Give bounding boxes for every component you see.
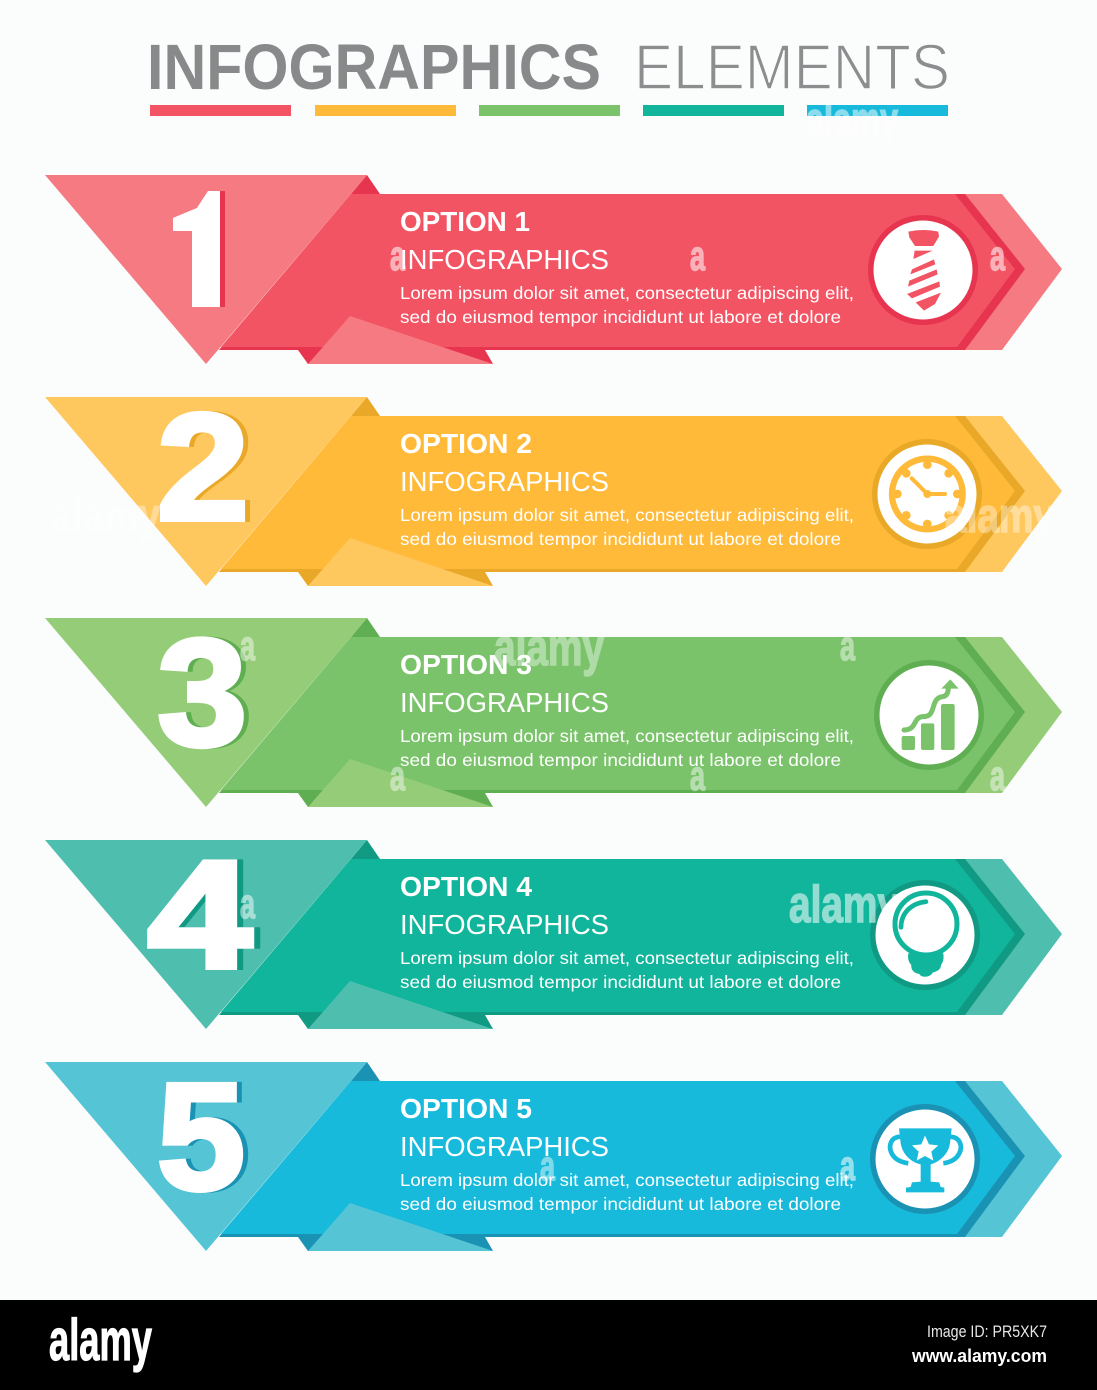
option 1 text: OPTION 1 <box>400 206 530 237</box>
option 4 text: OPTION 4 <box>400 871 532 902</box>
option 2 text: INFOGRAPHICS <box>400 466 609 497</box>
option 5 text <box>400 1093 854 1214</box>
watermarks: a <box>240 622 255 669</box>
option 5 text: sed do eiusmod tempor incididunt ut labore et dolore <box>400 1194 841 1214</box>
watermarks: a <box>690 232 705 279</box>
footer bar <box>0 1300 1097 1390</box>
option 3 text: OPTION 3 <box>400 649 532 680</box>
option 3 text: Lorem ipsum dolor sit amet, consectetur adipiscing elit, <box>400 726 854 746</box>
panel: option 5 <box>45 1052 1062 1251</box>
option 5 text: OPTION 5 <box>400 1093 532 1124</box>
watermarks <box>50 93 1055 1189</box>
option 4 text: sed do eiusmod tempor incididunt ut labore et dolore <box>400 972 841 992</box>
watermarks: alamy <box>494 619 604 677</box>
title <box>147 31 950 103</box>
panel: option 3 <box>45 608 1062 807</box>
number 3: 3 <box>162 608 252 778</box>
image id: Image ID: PR5XK7 <box>927 1322 1047 1341</box>
number 1 <box>173 191 225 307</box>
watermarks: a <box>390 232 405 279</box>
option 3 text: INFOGRAPHICS <box>400 687 609 718</box>
title: ELEMENTS <box>634 31 950 103</box>
option 4 text: INFOGRAPHICS <box>400 909 609 940</box>
option 1 text: sed do eiusmod tempor incididunt ut labore et dolore <box>400 307 841 327</box>
title: INFOGRAPHICS <box>147 31 601 103</box>
number 4: 4 <box>148 830 252 1000</box>
icon: trophy <box>870 1104 980 1214</box>
watermarks: a <box>690 752 705 799</box>
option 1 text: Lorem ipsum dolor sit amet, consectetur adipiscing elit, <box>400 283 854 303</box>
panel: option 4 <box>45 830 1062 1029</box>
watermarks: a <box>990 232 1005 279</box>
option 3 text: sed do eiusmod tempor incididunt ut labore et dolore <box>400 750 841 770</box>
option 2 text <box>400 428 854 549</box>
number 1: 1 <box>158 162 246 341</box>
option 5 text: Lorem ipsum dolor sit amet, consectetur adipiscing elit, <box>400 1170 854 1190</box>
watermarks: a <box>240 880 255 927</box>
icon: clock <box>872 439 982 549</box>
watermarks: a <box>990 752 1005 799</box>
option 4 text <box>400 871 854 992</box>
number 2: 2 <box>162 382 254 552</box>
number 4: 4 <box>154 830 258 1000</box>
website: www.alamy.com <box>911 1346 1047 1366</box>
watermarks: a <box>840 622 855 669</box>
number 5: 5 <box>157 1052 245 1222</box>
icon: light bulb <box>870 880 980 990</box>
option 1 text: INFOGRAPHICS <box>400 244 609 275</box>
icon: necktie <box>868 215 978 325</box>
watermarks: a <box>540 1142 555 1189</box>
colour legend bars <box>150 105 948 116</box>
number 3: 3 <box>158 608 247 778</box>
number 1: 1 <box>163 162 251 341</box>
option 2 text: OPTION 2 <box>400 428 532 459</box>
panel: option 1 <box>45 162 1062 364</box>
option 5 text: INFOGRAPHICS <box>400 1131 609 1162</box>
option 2 text: Lorem ipsum dolor sit amet, consectetur adipiscing elit, <box>400 505 854 525</box>
watermarks: alamy <box>806 93 898 145</box>
watermarks: alamy <box>945 490 1055 543</box>
number 5: 5 <box>162 1052 250 1222</box>
watermarks: alamy <box>789 876 899 934</box>
watermarks: a <box>390 752 405 799</box>
icon: growth chart <box>874 660 984 770</box>
watermarks: alamy <box>50 490 160 543</box>
panel: option 2 <box>45 382 1062 586</box>
footer logo: alamy <box>49 1308 152 1373</box>
option 3 text <box>400 649 854 770</box>
option 1 text <box>400 206 854 327</box>
watermarks: a <box>840 1142 855 1189</box>
option 2 text: sed do eiusmod tempor incididunt ut labore et dolore <box>400 529 841 549</box>
number 2: 2 <box>157 382 249 552</box>
option 4 text: Lorem ipsum dolor sit amet, consectetur adipiscing elit, <box>400 948 854 968</box>
